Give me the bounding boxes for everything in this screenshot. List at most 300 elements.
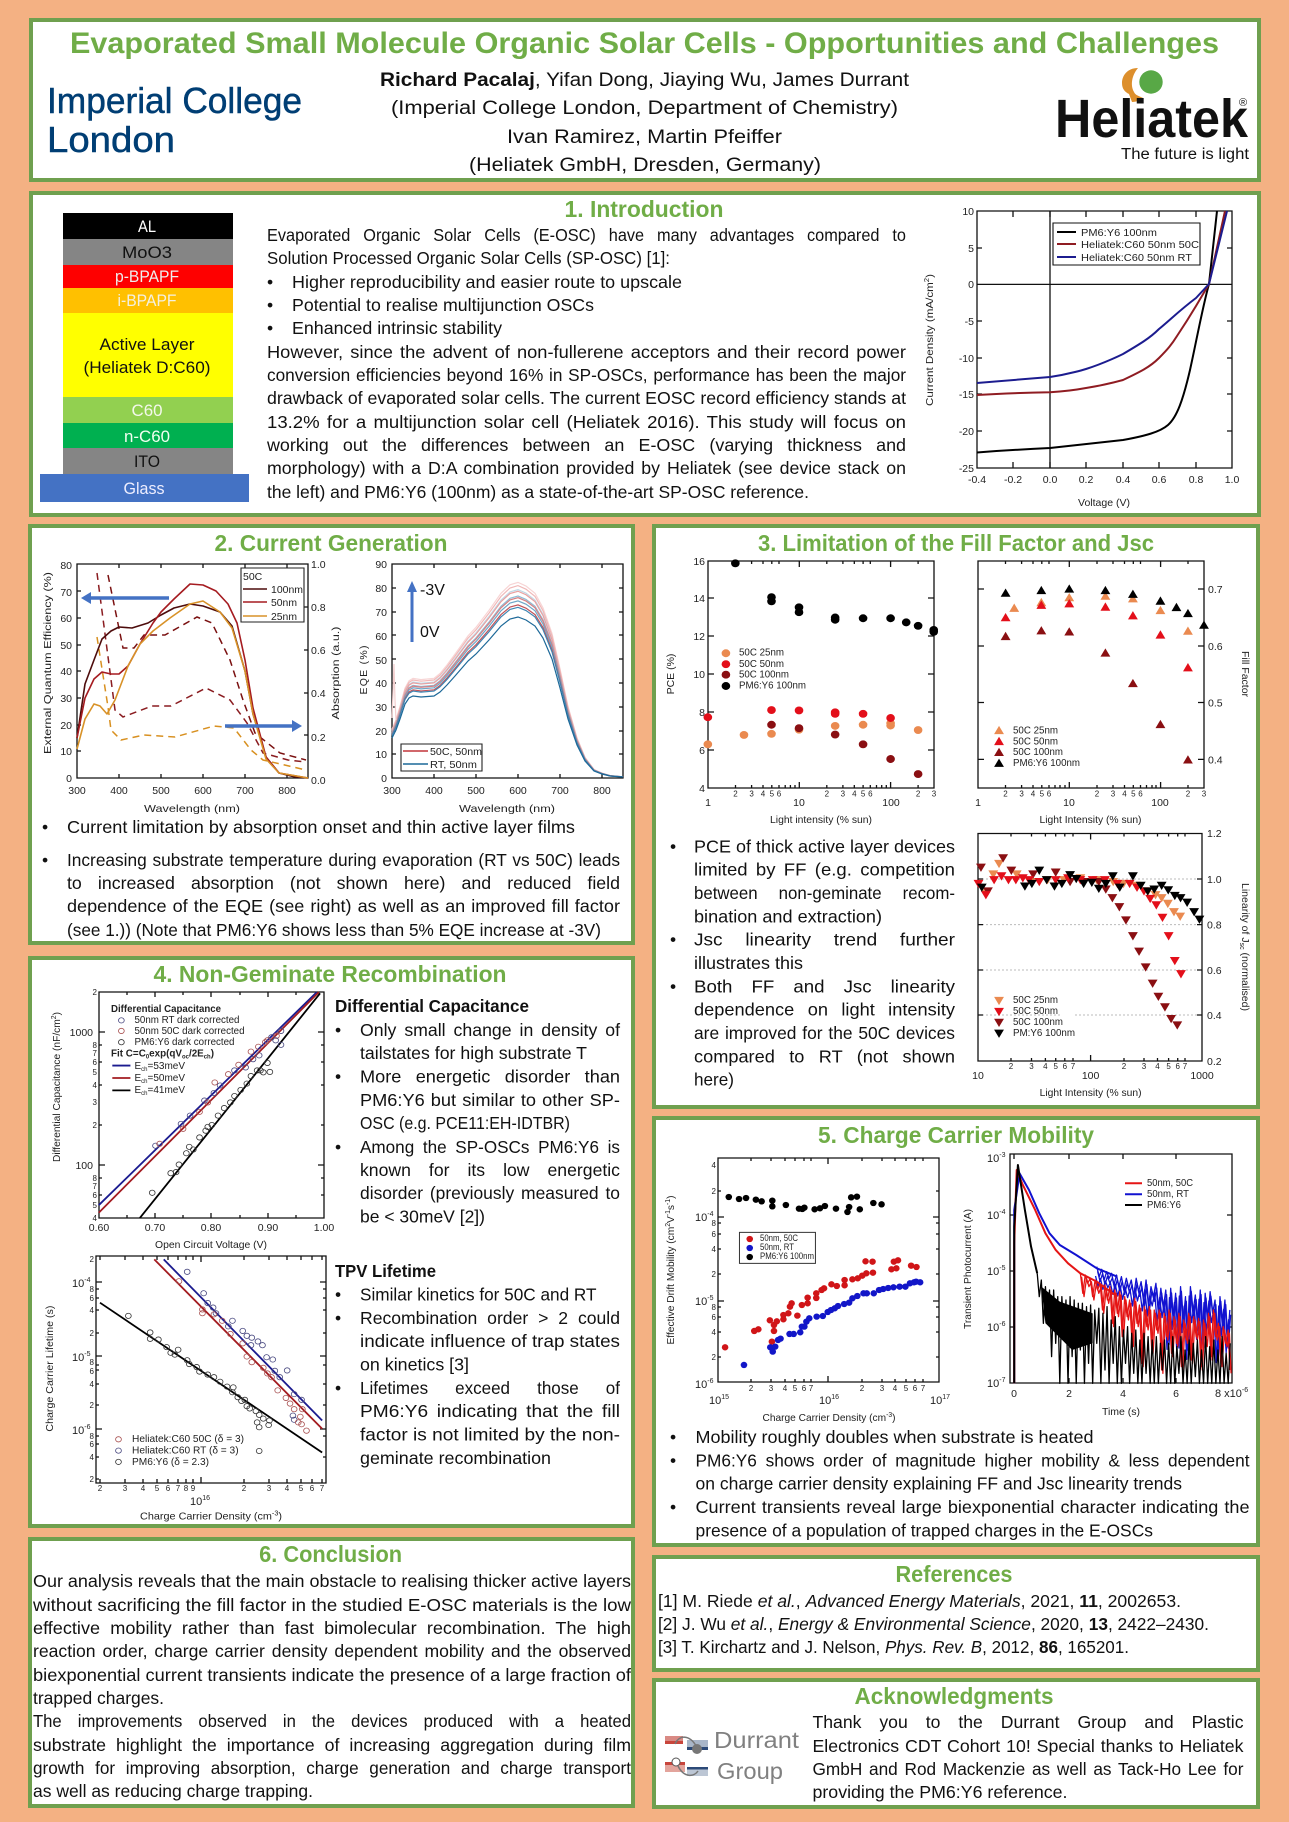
chart: transient photocurrent: -3 [999, 1152, 1006, 1159]
chart: J-V curves: -25 [959, 463, 974, 475]
panel: 1. Introduction [31, 193, 1259, 515]
chart: PCE vs light intensity: 4 [852, 790, 857, 798]
introduction text: morphology) with a D:A combination provided by Heliatek (see device stack on [267, 458, 906, 478]
chart: TPV lifetime: 6 [90, 1367, 95, 1376]
legend: E [134, 1085, 141, 1096]
chart: Jsc linearity: 100 [1082, 1070, 1100, 1082]
legend: =41meV [148, 1085, 185, 1096]
legend: ) [211, 1048, 214, 1060]
title: Evaporated Small Molecule Organic Solar Cells - Opportunities and Challenges [70, 27, 1219, 60]
acknowledgment text: Electronics CDT Cohort 10! Special thanks to Heliatek [812, 1736, 1244, 1756]
legend: Heliatek:C60 RT (δ = 3) [132, 1445, 239, 1457]
text: differential capacitance: More energetic disorder than [360, 1066, 620, 1086]
chart: drift mobility: 2 [712, 1187, 717, 1196]
chart: drift mobility: 15 [721, 1394, 729, 1401]
chart: transient photocurrent: -6 [999, 1321, 1006, 1328]
bullet text: Both FF and Jsc linearity [694, 976, 955, 996]
chart: J-V curves: 10 [962, 206, 974, 218]
chart: field dependence of EQE: 700 [551, 785, 569, 797]
legend [1053, 223, 1200, 265]
legend: oc [182, 1054, 190, 1060]
chart: drift mobility: -6 [707, 1378, 714, 1385]
legend: Heliatek:C60 50nm RT [1081, 252, 1193, 264]
acknowledgment text: Thank you to the Durrant Group and Plastic [812, 1712, 1244, 1732]
chart: J-V curves: -0.4 [968, 474, 986, 486]
chart: field dependence of EQE: 500 [467, 785, 485, 797]
chart: EQE and absorption: Absorption (a.u.) [330, 626, 342, 720]
legend: 50C 50nm [1013, 735, 1058, 747]
chart: drift mobility: 16 [831, 1394, 839, 1401]
chart: PCE vs light intensity: 6 [699, 745, 705, 757]
legend: 50nm, RT [1147, 1188, 1190, 1200]
chart: PCE vs light intensity: 6 [868, 790, 873, 798]
legend: Differential Capacitance [111, 1004, 221, 1015]
chart: field dependence of EQE: 800 [593, 785, 611, 797]
chart: drift mobility: 6 [913, 1384, 918, 1393]
legend: 50C [243, 571, 263, 583]
chart: differential capacitance: ) [51, 1012, 63, 1015]
conclusion text: growth for improving absorption, charge generation and charge transport [33, 1758, 631, 1778]
chart: TPV lifetime: 2 [90, 1401, 95, 1410]
chart: drift mobility: 4 [712, 1245, 717, 1254]
chart: J-V curves: 5 [968, 243, 974, 255]
chart: differential capacitance: 6 [93, 1191, 98, 1200]
text: TPV lifetime: factor is not limited by the non- [360, 1424, 620, 1444]
chart: drift mobility: 2 [665, 1223, 672, 1227]
legend: 50nm RT dark corrected [134, 1015, 240, 1026]
chart: Jsc linearity: 2 [1122, 1062, 1127, 1071]
chart: EQE and absorption: 500 [152, 785, 170, 797]
chart: J-V curves: Voltage (V) [1078, 497, 1130, 509]
chart: TPV lifetime: 2 [90, 1255, 95, 1264]
bullet text [670, 1427, 1250, 1540]
chart: drift mobility: 6 [712, 1230, 717, 1239]
chart: TPV lifetime: 10 [72, 1278, 84, 1290]
heading: 2. Current Generation [214, 530, 448, 556]
chart: EQE and absorption: 0.6 [311, 645, 326, 657]
legend: 50C 25nm [1013, 724, 1058, 736]
chart: Jsc linearity: 4 [1155, 1062, 1160, 1071]
conclusion text: reaction order, charge carrier density dependent mobility and the observed [33, 1641, 631, 1661]
text: differential capacitance: • [335, 1020, 341, 1040]
text: TPV lifetime: • [335, 1284, 341, 1304]
chart: drift mobility: 4 [712, 1161, 717, 1170]
chart: drift mobility: 7 [921, 1384, 926, 1393]
chart: TPV lifetime: -3 [272, 1510, 278, 1518]
chart: drift mobility: V [665, 1216, 677, 1223]
device stack diagram [40, 213, 249, 502]
chart: fill factor vs light intensity: 2 [1003, 790, 1008, 798]
chart: fill factor vs light intensity: 5 [1040, 790, 1045, 798]
legend: 50C 100nm [1013, 746, 1063, 758]
chart: differential capacitance: 7 [93, 1049, 98, 1058]
heading: 6. Conclusion [259, 1541, 402, 1567]
chart: J-V curves: -15 [959, 389, 974, 401]
chart: J-V curves: ) [924, 274, 936, 278]
introduction text: drawback of evaporated solar cells. The current EOSC record efficiency stands at [267, 388, 906, 408]
chart: transient photocurrent: Transient Photocurrent (A) [962, 1209, 974, 1329]
chart: EQE and absorption: 60 [60, 613, 72, 625]
authors and affiliations [380, 70, 910, 176]
device stack diagram: (Heliatek D:C60) [84, 358, 210, 377]
arrow: points to right axis [225, 720, 302, 732]
chart: drift mobility: 3 [769, 1384, 774, 1393]
chart: differential capacitance: 2 [93, 1121, 98, 1130]
chart: fill factor vs light intensity: 0.7 [1208, 584, 1223, 596]
chart: Jsc linearity: 7 [1071, 1062, 1076, 1071]
legend: 25nm [271, 611, 297, 623]
bullet text: • [670, 1450, 676, 1470]
device stack diagram: MoO3 [122, 243, 172, 262]
chart: TPV lifetime: 4 [285, 1484, 290, 1493]
chart: EQE and absorption: 80 [60, 560, 72, 572]
text: differential capacitance: OSC (e.g. PCE11:EH-IDTBR) [360, 1113, 570, 1133]
legend: ch [141, 1079, 148, 1085]
legend: 50nm 50C dark corrected [134, 1026, 244, 1037]
chart: transient photocurrent: 10 [987, 1210, 999, 1222]
bullet text: Current limitation by absorption onset and thin active layer films [67, 817, 575, 837]
bullet text [42, 817, 620, 940]
bullet text [670, 836, 955, 1090]
chart: field dependence of EQE: 80 [375, 583, 387, 595]
chart: drift mobility: 6 [712, 1313, 717, 1322]
introduction text: • [267, 318, 273, 338]
chart: fill factor vs light intensity: 3 [1111, 790, 1116, 798]
panel: 5. Charge Carrier Mobility [654, 1118, 1258, 1545]
panel: header [31, 20, 1259, 180]
chart: drift mobility: 2 [712, 1270, 717, 1279]
chart: Jsc linearity: (normalised) [1239, 950, 1251, 1011]
text: TPV lifetime: PM6:Y6 indicating that the fill [360, 1401, 620, 1421]
chart: EQE and absorption [42, 559, 342, 815]
chart: EQE and absorption: 10 [60, 746, 72, 758]
chart: EQE and absorption: 400 [110, 785, 128, 797]
chart: TPV lifetime: 10 [72, 1352, 84, 1364]
logo: Imperial College London [47, 80, 302, 160]
logo: Imperial College London: London [47, 119, 175, 160]
chart: fill factor vs light intensity: 2 [1186, 790, 1191, 798]
chart: differential capacitance: 0.90 [258, 1222, 278, 1234]
bullet text: limited by FF (e.g. competition [694, 860, 955, 880]
chart: PCE vs light intensity: 4 [761, 790, 766, 798]
chart: EQE and absorption: 0.8 [311, 602, 326, 614]
chart: differential capacitance: 7 [93, 1182, 98, 1191]
text: TPV lifetime: geminate recombination [360, 1448, 551, 1468]
chart: differential capacitance: 4 [93, 1081, 98, 1090]
introduction text [266, 225, 906, 502]
chart: TPV lifetime: 4 [90, 1306, 95, 1315]
chart: drift mobility: 10 [695, 1296, 707, 1308]
device stack diagram: ITO [134, 452, 160, 471]
chart: EQE and absorption: 0.0 [311, 775, 326, 787]
chart: EQE and absorption: 50 [60, 640, 72, 652]
chart: PCE vs light intensity: 14 [693, 593, 705, 605]
chart: drift mobility: 10 [709, 1395, 721, 1407]
chart: differential capacitance: 5 [93, 1201, 98, 1210]
chart: PCE vs light intensity: PCE (%) [665, 654, 677, 694]
legend: exp(qV [149, 1048, 182, 1060]
chart: TPV lifetime: 16 [202, 1495, 210, 1502]
chart: transient photocurrent: 10 [987, 1378, 999, 1390]
legend [739, 646, 806, 692]
heading: 3. Limitation of the Fill Factor and Jsc [758, 530, 1154, 556]
chart: Jsc linearity: 0.2 [1207, 1056, 1222, 1068]
introduction text: Enhanced intrinsic stability [292, 318, 502, 338]
chart: TPV lifetime: 9 [191, 1484, 196, 1493]
legend: PM6:Y6 dark corrected [134, 1037, 234, 1048]
chart: J-V curves: 0.2 [1079, 474, 1093, 486]
device stack diagram: AL [138, 217, 156, 236]
text: differential capacitance: known for its low energetic [360, 1160, 620, 1180]
chart: field dependence of EQE: -3V [420, 582, 445, 599]
chart: EQE and absorption: 800 [278, 785, 296, 797]
legend: =50meV [148, 1073, 185, 1084]
chart: Jsc linearity: 1000 [1190, 1070, 1214, 1082]
introduction text: the left) and PM6:Y6 (100nm) as a state-of-the-art SP-OSC reference. [267, 482, 809, 502]
chart: TPV lifetime [44, 1255, 326, 1522]
bullet text: dependence on light intensity [694, 1000, 955, 1020]
introduction text: • [267, 272, 273, 292]
chart: fill factor vs light intensity: 2 [1095, 790, 1100, 798]
legend: 50C 100nm [739, 668, 789, 680]
chart: drift mobility: 10 [695, 1212, 707, 1224]
chart: TPV lifetime: 8 [90, 1432, 95, 1441]
introduction text: Higher reproducibility and easier route to upscale [292, 272, 682, 292]
chart: TPV lifetime: 6 [310, 1484, 315, 1493]
chart: TPV lifetime: Charge Carrier Density (cm [140, 1510, 268, 1522]
bullet text: • [670, 1497, 676, 1517]
chart: TPV lifetime: 4 [141, 1484, 146, 1493]
introduction text: Potential to realise multijunction OSCs [292, 295, 594, 315]
chart: TPV lifetime: 4 [90, 1453, 95, 1462]
bullet text: (see 1.)) (Note that PM6:Y6 shows less than 5% EQE increase at -3V) [67, 920, 601, 940]
legend: Heliatek:C60 50C (δ = 3) [132, 1433, 244, 1445]
chart: drift mobility: Effective Drift Mobility (cm [665, 1223, 677, 1344]
chart: PCE vs light intensity: 10 [693, 669, 705, 681]
chart: TPV lifetime: 2 [90, 1475, 95, 1484]
legend: 0 [146, 1054, 150, 1060]
chart: fill factor vs light intensity: 1 [975, 797, 981, 809]
chart: field dependence of EQE: 60 [375, 631, 387, 643]
chart: fill factor vs light intensity: 4 [1031, 790, 1036, 798]
text: differential capacitance: • [335, 1066, 341, 1086]
chart: J-V curves: 0.8 [1189, 474, 1203, 486]
logo: Durrant Group: Durrant [714, 1727, 800, 1753]
chart: fill factor vs light intensity: Light Intensity (% sun) [1040, 814, 1142, 826]
legend: 50nm, 50C [760, 1233, 798, 1243]
chart: J-V curves [924, 206, 1239, 509]
chart: PCE vs light intensity: 3 [932, 790, 937, 798]
chart: drift mobility: ) [892, 1412, 896, 1424]
logo: Heliatek: Heliatek [1055, 89, 1249, 149]
legend: PM6:Y6 (δ = 2.3) [132, 1456, 209, 1468]
heading: 5. Charge Carrier Mobility [818, 1122, 1094, 1148]
bullet text: • [670, 976, 676, 996]
chart: drift mobility: Charge Carrier Density (cm [762, 1412, 890, 1424]
legend [1013, 724, 1080, 769]
device stack diagram: n-C60 [124, 427, 170, 446]
conclusion text [32, 1571, 631, 1801]
chart: differential capacitance: 4 [93, 1214, 98, 1223]
chart: Jsc linearity: 10 [972, 1070, 984, 1082]
chart: transient photocurrent: -5 [999, 1265, 1006, 1272]
chart: Jsc linearity: Light Intensity (% sun) [1040, 1087, 1142, 1099]
legend [1125, 1177, 1193, 1211]
text: differential capacitance: be < 30meV [2]) [360, 1206, 485, 1226]
chart: J-V curves: 1.0 [1225, 474, 1239, 486]
chart: EQE and absorption: 40 [60, 666, 72, 678]
chart: differential capacitance: Open Circuit Voltage (V) [155, 1239, 267, 1251]
introduction text: • [267, 295, 273, 315]
text: TPV lifetime: Similar kinetics for 50C and RT [360, 1284, 597, 1304]
legend: 50nm [271, 597, 297, 609]
bullet text: bination and extraction) [694, 906, 882, 926]
chart: field dependence of EQE: 10 [375, 749, 387, 761]
chart: Jsc linearity [972, 828, 1251, 1099]
chart: Jsc linearity: 5 [1053, 1062, 1058, 1071]
heading: Acknowledgments [854, 1683, 1054, 1709]
chart: fill factor vs light intensity: 0.5 [1208, 698, 1223, 710]
text: differential capacitance [335, 996, 620, 1226]
bullet text: to increased absorption (not shown here) and reduced field [67, 873, 620, 893]
legend: Heliatek:C60 50nm 50C [1081, 239, 1199, 251]
legend: PM6:Y6 100nm [1013, 757, 1080, 769]
introduction text: Solution Processed Organic Solar Cells (SP-OSC) [1]: [267, 248, 670, 268]
chart: Jsc linearity: 6 [1175, 1062, 1180, 1071]
chart: Jsc linearity: 1.0 [1207, 874, 1222, 886]
chart: J-V curves: 0.4 [1116, 474, 1130, 486]
chart: PCE vs light intensity: 16 [693, 556, 705, 568]
text: TPV lifetime: on kinetics [3] [360, 1354, 469, 1374]
chart: drift mobility: 2 [712, 1353, 717, 1362]
chart: differential capacitance: 2 [93, 988, 98, 997]
device stack diagram: i-BPAPF [118, 291, 176, 310]
logo: Durrant Group [665, 1727, 800, 1784]
text: TPV lifetime: • [335, 1378, 341, 1398]
legend: PM6:Y6 100nm [760, 1251, 814, 1261]
chart: EQE and absorption: 0 [66, 773, 72, 785]
authors and affiliations: Richard Pacalaj , Yifan Dong, Jiaying Wu, James Durrant [380, 70, 910, 91]
chart: PCE vs light intensity: 5 [861, 790, 866, 798]
chart: differential capacitance: 8 [93, 1174, 98, 1183]
chart: transient photocurrent: Time (s) [1102, 1406, 1140, 1418]
chart: drift mobility: 2 [860, 1384, 865, 1393]
legend: E [134, 1073, 141, 1084]
chart: drift mobility [665, 1158, 950, 1424]
chart: TPV lifetime: -4 [84, 1277, 91, 1284]
legend: 50C 100nm [1013, 1016, 1063, 1028]
chart: TPV lifetime: 10 [72, 1425, 84, 1437]
chart: fill factor vs light intensity: 4 [1122, 790, 1127, 798]
chart: EQE and absorption: 70 [60, 587, 72, 599]
conclusion text: as well as reducing charge trapping. [33, 1781, 313, 1801]
authors and affiliations: Ivan Ramirez, Martin Pfeiffer [507, 127, 783, 148]
chart: EQE and absorption: 0.2 [311, 732, 326, 744]
text: differential capacitance: tailstates for high substrate T [360, 1043, 587, 1063]
chart: Jsc linearity: 6 [1063, 1062, 1068, 1071]
chart: drift mobility: 3 [880, 1384, 885, 1393]
legend: 50C 25nm [739, 646, 784, 658]
chart: EQE and absorption: Wavelength (nm) [144, 803, 240, 815]
text: TPV lifetime [335, 1261, 620, 1468]
chart: Jsc linearity: Linearity of J [1239, 883, 1251, 943]
chart: PCE vs light intensity: 12 [693, 631, 705, 643]
bullet text: on charge carrier density explaining FF and Jsc linearity trends [696, 1474, 1182, 1494]
chart: TPV lifetime: 2 [98, 1484, 103, 1493]
legend: 100nm [271, 584, 303, 596]
chart: PCE vs light intensity: 2 [825, 790, 830, 798]
panel: References [654, 1557, 1258, 1670]
bullet text: PM6:Y6 shows order of magnitude higher mobility & less dependent [696, 1450, 1250, 1470]
chart: transient photocurrent: 2 [1066, 1388, 1072, 1400]
chart: drift mobility: ) [665, 1196, 677, 1199]
chart: J-V curves: 0.6 [1152, 474, 1166, 486]
chart: EQE and absorption: 1.0 [311, 559, 326, 571]
legend: 50C, 50nm [430, 746, 482, 758]
panel: 4. Non-Geminate Recombination [30, 958, 633, 1526]
chart: drift mobility: -1 [665, 1210, 672, 1216]
chart: TPV lifetime: 3 [267, 1484, 272, 1493]
chart: Jsc linearity: 2 [1009, 1062, 1014, 1071]
reference list: [3] T. Kirchartz and J. Nelson, Phys. Rev. B, 2012, 86, 165201. [658, 1637, 1129, 1657]
chart: field dependence of EQE: 20 [375, 726, 387, 738]
chart: transient photocurrent: -7 [999, 1377, 1006, 1384]
chart: J-V curves: -10 [959, 353, 974, 365]
chart: fill factor vs light intensity: 5 [1131, 790, 1136, 798]
bullet text: • [670, 1427, 676, 1447]
reference list: [2] J. Wu et al., Energy & Environmental Science, 2020, 13, 2422–2430. [658, 1614, 1209, 1634]
bullet text: • [42, 850, 48, 870]
heading: 4. Non-Geminate Recombination [154, 961, 506, 987]
device stack diagram: p-BPAPF [115, 267, 179, 286]
chart: Jsc linearity: 7 [1183, 1062, 1188, 1071]
legend [1013, 994, 1075, 1039]
chart: TPV lifetime: 6 [166, 1484, 171, 1493]
chart: TPV lifetime: 6 [90, 1440, 95, 1449]
chart: field dependence of EQE: 90 [375, 559, 387, 571]
chart: TPV lifetime: 8 [90, 1285, 95, 1294]
bullet text: presence of a population of trapped charges in the E-OSCs [696, 1520, 1153, 1540]
chart: J-V curves: Current Density (mA/cm [924, 294, 936, 406]
text: differential capacitance: Differential Capacitance [335, 996, 529, 1016]
bullet text: compared to RT (not shown [694, 1046, 955, 1066]
chart: EQE and absorption: 700 [236, 785, 254, 797]
panel: 2. Current Generation [30, 526, 633, 943]
chart: TPV lifetime: 7 [176, 1484, 181, 1493]
conclusion text: The improvements observed in the devices produced with a heated [33, 1711, 631, 1731]
chart: fill factor vs light intensity: 0.6 [1208, 641, 1223, 653]
chart: fill factor vs light intensity: 6 [1138, 790, 1143, 798]
chart: J-V curves: 2 [924, 278, 931, 282]
chart: drift mobility: 7 [809, 1384, 814, 1393]
chart: PCE vs light intensity: 3 [841, 790, 846, 798]
chart: EQE and absorption: 600 [194, 785, 212, 797]
bullet text: • [670, 836, 676, 856]
chart: transient photocurrent: 8 x10 [1215, 1388, 1242, 1400]
chart: Jsc linearity: 4 [1043, 1062, 1048, 1071]
chart: field dependence of EQE: 0 [381, 773, 387, 785]
bullet text: dependence of the EQE (see right) as well as an improved fill factor [67, 896, 620, 916]
chart: drift mobility: 5 [904, 1384, 909, 1393]
bullet text: • [42, 817, 48, 837]
bullet text: Current transients reveal large biexponential character indicating the [696, 1497, 1250, 1517]
chart: field dependence of EQE: 40 [375, 678, 387, 690]
text: TPV lifetime: Recombination order > 2 could [360, 1308, 620, 1328]
chart: TPV lifetime: 2 [242, 1484, 247, 1493]
conclusion text: trapped charges. [33, 1688, 164, 1708]
bullet text: here) [694, 1070, 734, 1090]
heading: References [896, 1561, 1012, 1587]
